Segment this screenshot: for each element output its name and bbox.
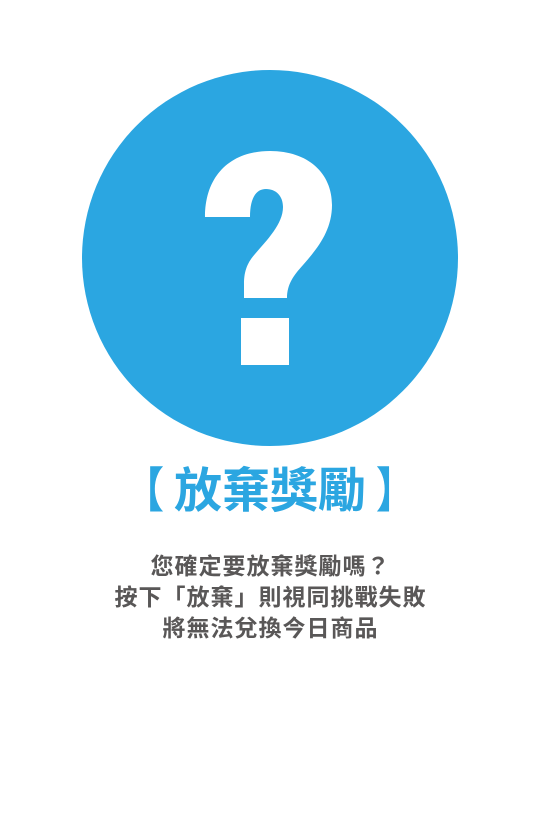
text block: confirmation message: 將無法兌換今日商品 bbox=[162, 615, 378, 641]
icon: question mark in blue circle bbox=[82, 70, 458, 446]
title bbox=[123, 465, 414, 518]
title: 放棄獎勵 bbox=[174, 465, 366, 518]
title: 【 bbox=[123, 465, 164, 518]
text block: confirmation message bbox=[114, 553, 426, 641]
text block: confirmation message: 您確定要放棄獎勵嗎？ bbox=[150, 553, 390, 579]
text block: confirmation message: 按下「放棄」則視同挑戰失敗 bbox=[114, 584, 426, 610]
title: 】 bbox=[376, 465, 414, 518]
